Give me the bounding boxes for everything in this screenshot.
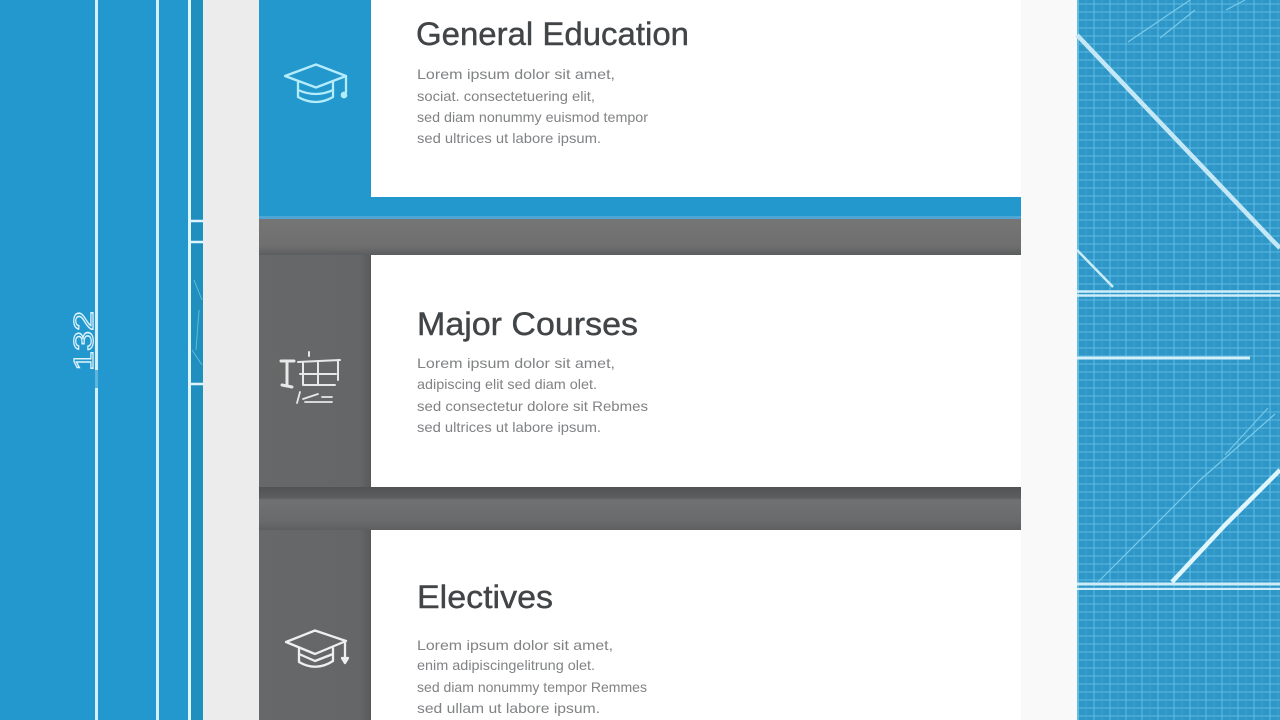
panel: Major Courses xyxy=(259,219,1021,496)
icon: graduation cap xyxy=(285,64,346,102)
icon: course sketch xyxy=(281,352,340,403)
text block: Electives: Lorem ipsum dolor sit amet, xyxy=(417,637,613,653)
text block: General Education: Lorem ipsum dolor sit amet, xyxy=(417,66,615,82)
card: General Education xyxy=(371,0,1021,197)
panel: General Education xyxy=(259,0,1021,219)
divider band xyxy=(259,487,1021,530)
text block: General Education xyxy=(417,66,648,146)
heading: Major Courses: Major Courses xyxy=(417,306,638,342)
heading: General Education: General Education xyxy=(416,16,689,52)
text block: General Education: sed diam nonummy euismod tempor xyxy=(417,109,648,125)
text block: Major Courses: sed ultrices ut labore ipsum. xyxy=(417,419,601,435)
right margin strip xyxy=(1021,0,1077,720)
text block: Electives: enim adipiscingelitrung olet. xyxy=(417,657,595,673)
text block: General Education: sociat. consectetuering elit, xyxy=(417,88,595,104)
left blueprint background xyxy=(0,0,203,720)
text block: General Education: sed ultrices ut labore ipsum. xyxy=(417,130,601,146)
text block: Major Courses xyxy=(417,355,648,435)
text block: Electives: sed ullam ut labore ipsum. xyxy=(417,700,600,716)
text block: Major Courses: adipiscing elit sed diam olet. xyxy=(417,376,597,392)
card: Electives xyxy=(371,530,1021,720)
left margin strip xyxy=(203,0,259,720)
text block: Electives: sed diam nonummy tempor Remmes xyxy=(417,679,647,695)
card: Major Courses xyxy=(371,255,1021,487)
heading: Electives: Electives xyxy=(417,579,553,615)
text block: Major Courses: sed consectetur dolore sit Rebmes xyxy=(417,398,648,414)
right blueprint grid panel xyxy=(1077,0,1280,720)
icon: graduation cap outline xyxy=(286,630,348,667)
panel: Electives xyxy=(259,530,1021,720)
blueprint label: 132 xyxy=(68,311,99,371)
text block: Major Courses: Lorem ipsum dolor sit amet, xyxy=(417,355,615,371)
text block: Electives xyxy=(417,637,647,716)
